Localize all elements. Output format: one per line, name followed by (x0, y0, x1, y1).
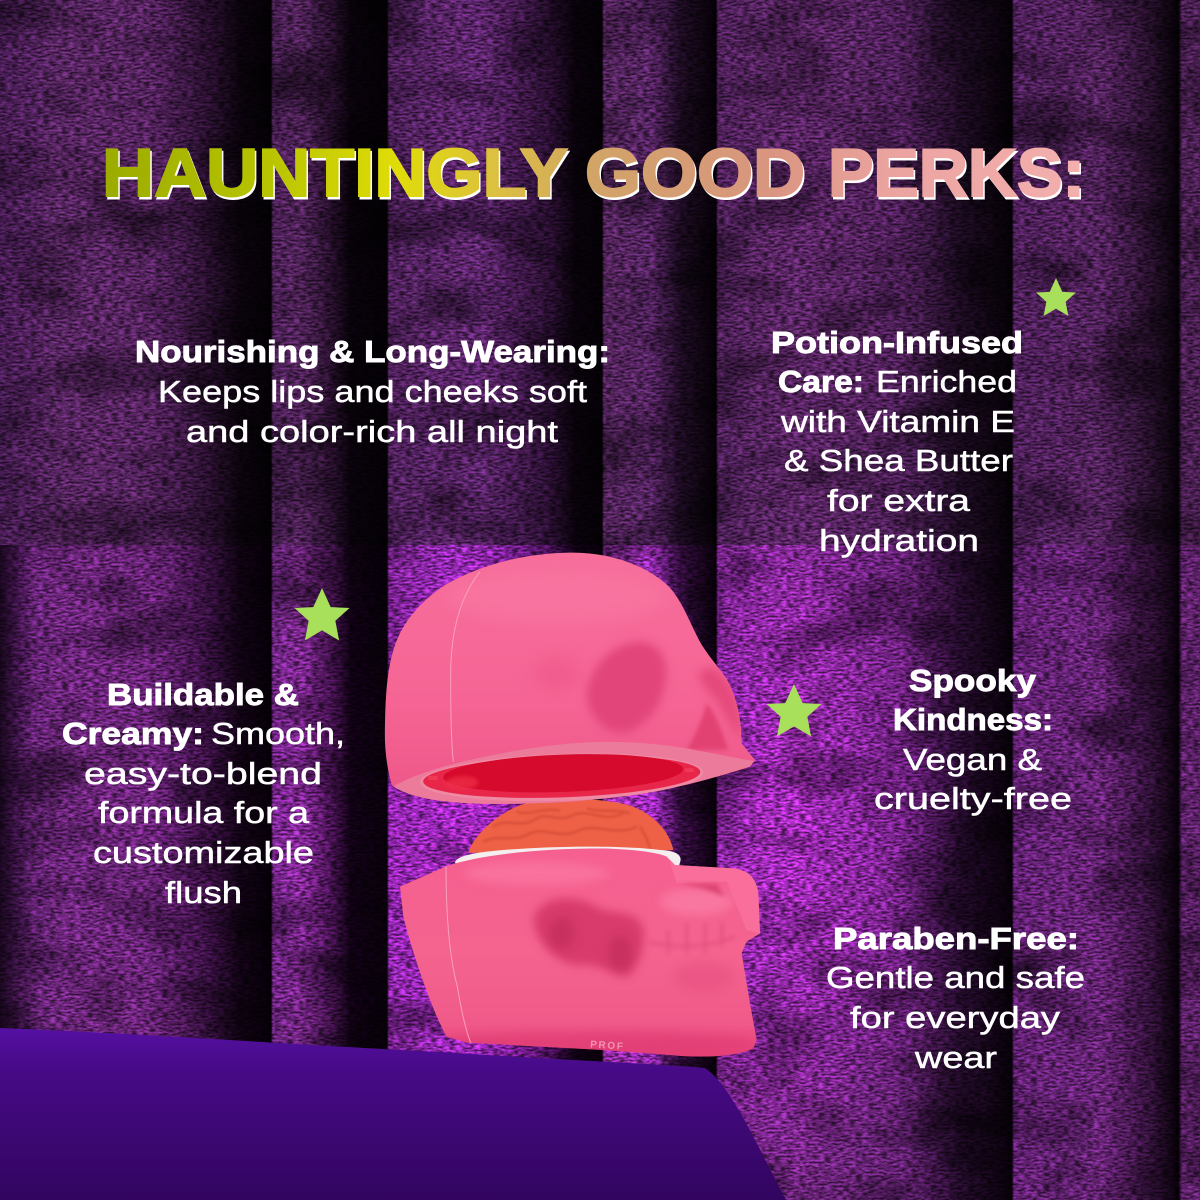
text block: potion-infused care: for extra (827, 483, 971, 518)
text block: potion-infused care: Care: (778, 364, 864, 399)
jaw socket shadow (533, 898, 644, 977)
eye socket (587, 642, 667, 733)
text block: potion-infused care: Enriched (876, 364, 1017, 399)
text block: buildable and creamy: Smooth, (211, 716, 345, 751)
text block: nourishing and long-wearing: Nourishing & Long-Wearing: (135, 334, 610, 369)
seam line (451, 572, 480, 762)
brain balm (468, 799, 673, 855)
text block: buildable and creamy: easy-to-blend (84, 756, 322, 791)
title (102, 135, 1086, 214)
title: GOOD (585, 135, 805, 211)
text block: buildable and creamy: Creamy: (62, 716, 204, 751)
text block: spooky kindness: cruelty-free (874, 781, 1072, 816)
title: GOOD (586, 138, 806, 214)
text block: potion-infused care: hydration (819, 523, 979, 558)
pink skull product (377, 547, 767, 1063)
text block: paraben-free: wear (914, 1040, 997, 1075)
far eye (698, 668, 741, 740)
skull top half (377, 547, 763, 810)
star left (294, 588, 350, 640)
text block: potion-infused care: & Shea Butter (784, 443, 1013, 478)
text block: paraben-free (826, 921, 1085, 1075)
brow shade (542, 664, 570, 682)
velvet platform (0, 1028, 786, 1200)
seam line (446, 866, 472, 1045)
skull opening (420, 754, 704, 801)
star right (766, 684, 822, 736)
jaw highlight (660, 888, 733, 915)
text block: potion-infused care: Potion-Infused (771, 325, 1023, 360)
embossed brand text: PROF (590, 1039, 625, 1053)
text block: buildable and creamy: customizable (93, 835, 314, 870)
text block: buildable and creamy: formula for a (98, 795, 310, 830)
text block: paraben-free: Paraben-Free: (833, 921, 1079, 956)
nose (687, 703, 728, 750)
text block: paraben-free: for everyday (850, 1000, 1061, 1035)
text block: buildable and creamy: flush (165, 875, 242, 910)
text block: nourishing and long-wearing: and color-rich all night (186, 414, 558, 449)
text block: potion-infused care (771, 325, 1023, 558)
text block: spooky kindness: Spooky (909, 663, 1037, 698)
text block: potion-infused care: with Vitamin E (780, 404, 1015, 439)
text block: buildable and creamy (62, 677, 345, 910)
title: PERKS: (830, 138, 1086, 214)
upper inner edge (668, 857, 760, 933)
skull bottom half (390, 799, 767, 1063)
title: HAUNTINGLY (102, 135, 568, 211)
under rim (390, 742, 757, 806)
text block: spooky kindness: Kindness: (893, 702, 1053, 737)
text block: paraben-free: Gentle and safe (826, 960, 1085, 995)
text block: nourishing and long-wearing: Keeps lips and cheeks soft (158, 374, 587, 409)
star top right (1036, 278, 1076, 316)
text block: spooky kindness: Vegan & (903, 742, 1042, 777)
teeth (653, 926, 733, 952)
text block: spooky kindness (874, 663, 1072, 816)
text block: nourishing and long-wearing (135, 334, 610, 449)
title: HAUNTINGLY (104, 138, 570, 214)
white inner ring (455, 847, 681, 868)
title: PERKS: (828, 135, 1085, 211)
text block: buildable and creamy: Buildable & (107, 677, 299, 712)
